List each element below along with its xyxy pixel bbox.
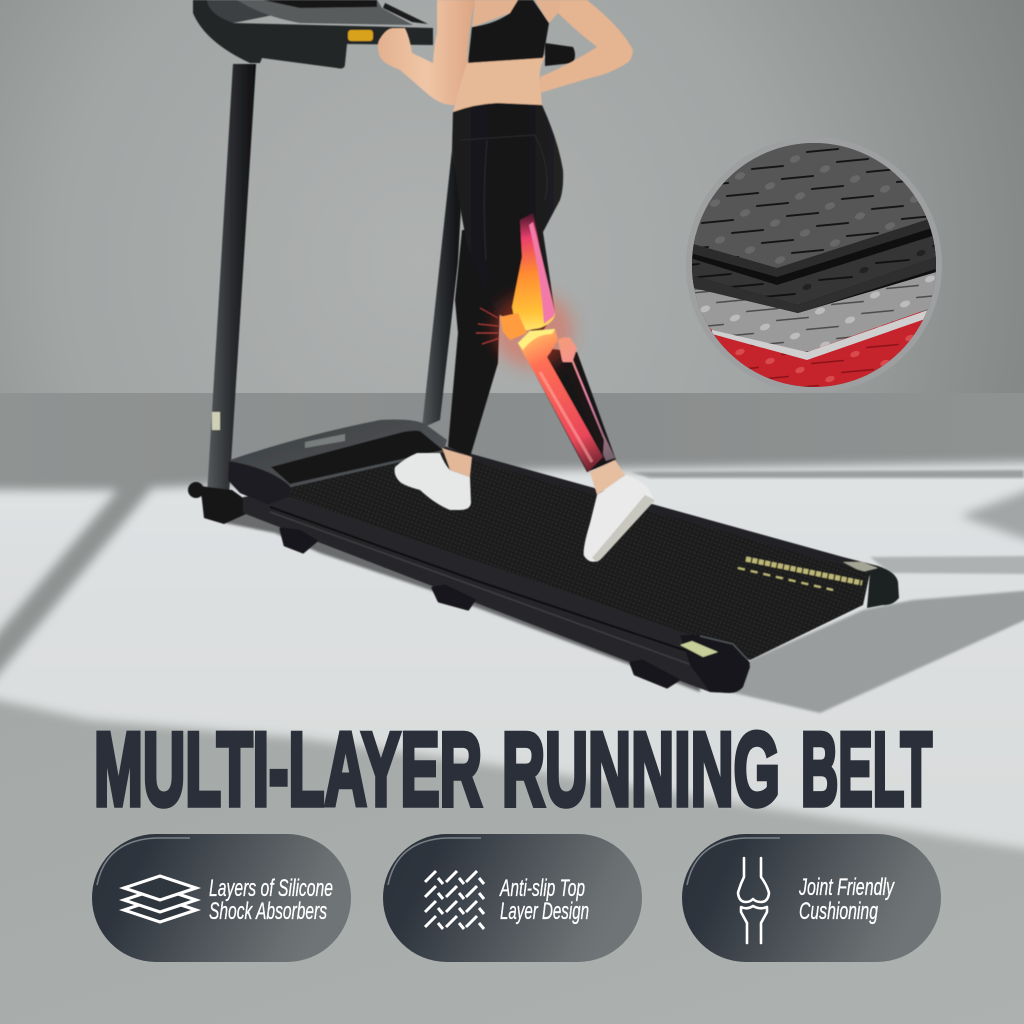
rear shoe bbox=[395, 453, 471, 510]
hood side bbox=[228, 461, 290, 505]
knee rays bbox=[476, 308, 500, 344]
inset ring bbox=[689, 140, 939, 390]
text: anti-slip: Layer Design bbox=[500, 898, 589, 925]
rear leg bbox=[448, 230, 500, 457]
grey layer bbox=[694, 271, 936, 352]
hood tray bbox=[271, 431, 443, 484]
black gap bbox=[690, 200, 950, 313]
shoulder blades bbox=[472, 0, 518, 27]
icon: stacked layers bbox=[124, 876, 196, 922]
text: joint friendly bbox=[798, 874, 895, 925]
near end cap bbox=[680, 635, 750, 693]
yellow button bbox=[348, 30, 373, 41]
side rail highlight bbox=[270, 507, 690, 652]
sports bra bbox=[468, 0, 549, 63]
inset: belt layers bbox=[686, 143, 942, 387]
brand print on belt bbox=[738, 559, 862, 590]
front shoe bbox=[584, 475, 655, 562]
runner bbox=[378, 0, 655, 562]
upright sticker bbox=[212, 412, 220, 430]
grey layer edge bbox=[712, 310, 928, 360]
left arm bbox=[378, 0, 475, 105]
front calf bbox=[520, 345, 616, 472]
console arm and grip bbox=[193, 0, 433, 68]
console screen edge bbox=[263, 0, 377, 8]
second layer bbox=[690, 232, 945, 305]
treadmill floor shadow bbox=[225, 500, 1024, 713]
icon: knee joint bbox=[738, 858, 769, 943]
text: anti-slip bbox=[499, 875, 589, 925]
front ankle bbox=[590, 460, 625, 495]
rear ankle bbox=[442, 448, 472, 477]
end cap bbox=[843, 560, 899, 608]
legging seams bbox=[460, 135, 547, 260]
text: anti-slip: Anti-slip Top bbox=[499, 875, 585, 902]
pill: layers of silicone bbox=[92, 834, 351, 962]
top layer edge bbox=[690, 218, 932, 277]
front upright post bbox=[207, 64, 256, 495]
femur pink edge bbox=[529, 222, 555, 324]
right handlebar end bbox=[545, 43, 575, 66]
foot pads bbox=[281, 529, 678, 687]
second layer edge bbox=[692, 258, 936, 313]
top layer bbox=[694, 143, 927, 268]
side rail and deck frame bbox=[243, 492, 750, 693]
dark gap between bones bbox=[562, 362, 604, 455]
treadmill bbox=[188, 0, 899, 693]
tibia bbox=[518, 330, 603, 472]
text: joint friendly: Joint Friendly bbox=[798, 874, 895, 901]
knee glow bbox=[493, 292, 573, 368]
folding hinge bbox=[188, 482, 246, 524]
rear upright post bbox=[422, 150, 462, 428]
pill: anti-slip bbox=[383, 834, 642, 962]
fibula bbox=[558, 337, 615, 461]
title: MULTI-LAYER bbox=[94, 712, 482, 828]
hood logo bbox=[305, 434, 345, 448]
knee joint light bbox=[518, 329, 555, 350]
right arm bbox=[540, 0, 633, 93]
text: layers of silicone: Shock Absorbers bbox=[209, 898, 327, 925]
icon: herringbone grip bbox=[425, 871, 484, 929]
shin highlight bbox=[540, 372, 592, 462]
hips and front thigh bbox=[452, 103, 563, 335]
pill: joint friendly bbox=[682, 834, 941, 962]
console plate bbox=[237, 0, 413, 25]
text: layers of silicone bbox=[209, 875, 333, 925]
running belt bbox=[290, 452, 870, 660]
inner grip surface bbox=[207, 0, 273, 23]
patella bbox=[500, 313, 527, 340]
text: layers of silicone: Layers of Silicone bbox=[209, 875, 333, 902]
femur bbox=[512, 213, 555, 332]
background: floor bbox=[0, 393, 1024, 1024]
far rail bbox=[443, 446, 878, 576]
console blade bbox=[383, 3, 428, 24]
motor hood bbox=[228, 420, 447, 505]
red layer bbox=[708, 312, 927, 387]
back bbox=[453, 56, 545, 112]
green label bbox=[680, 641, 718, 657]
title: RUNNING bbox=[502, 712, 780, 828]
background: studio wall bbox=[0, 0, 1024, 393]
text: joint friendly: Cushioning bbox=[799, 898, 878, 925]
